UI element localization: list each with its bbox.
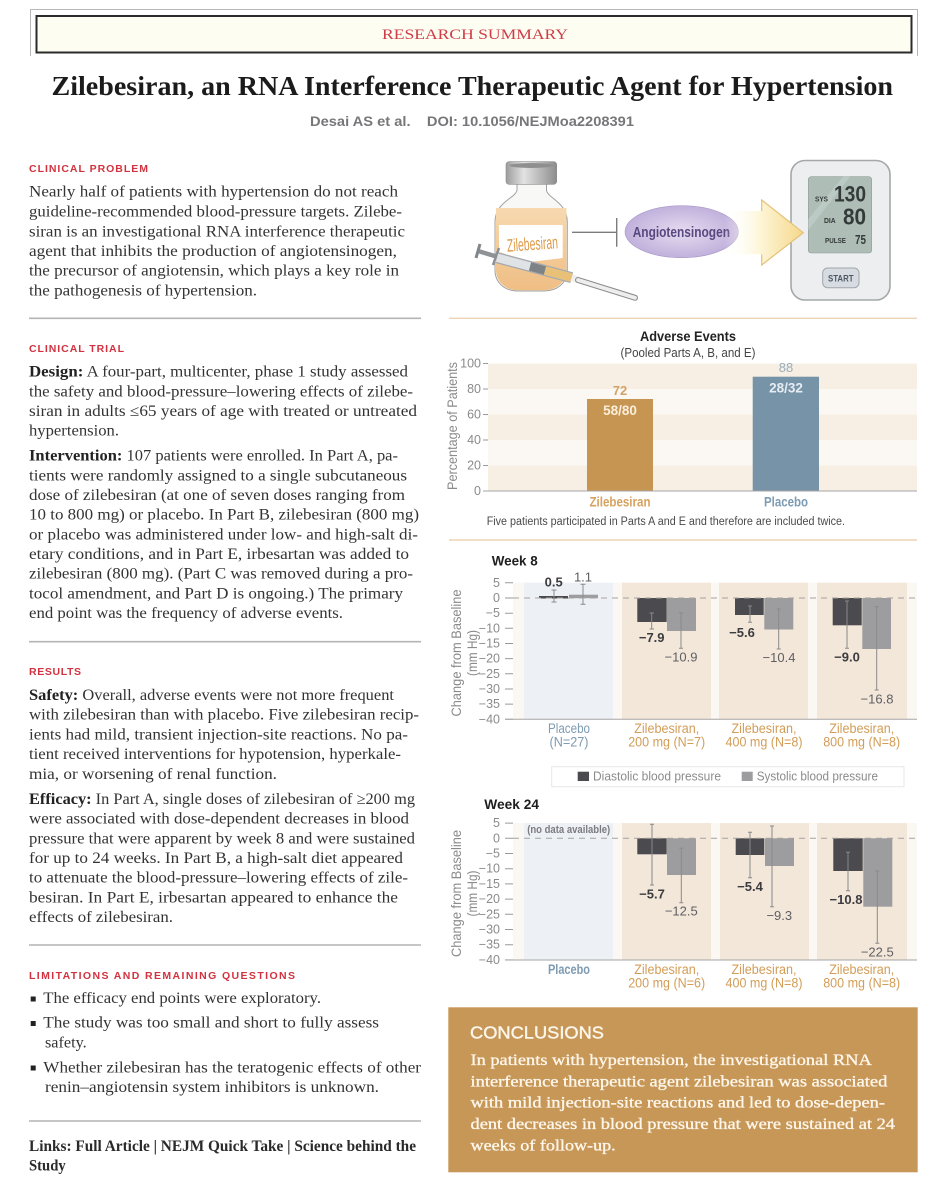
text: intervention: end point was the frequency of adverse events.	[29, 605, 343, 622]
text: conclusions body: weeks of follow-up.	[470, 1137, 616, 1154]
text: clinical problem body: guideline-recommended blood-pressure targets. Zilebe-	[29, 204, 402, 220]
text: intervention: or placebo was administered under low- and high-salt di-	[29, 526, 418, 543]
text: efficacy: besiran. In Part E, irbesartan appeared to enhance the	[29, 889, 398, 906]
icon: blood pressure monitor: 75	[855, 233, 866, 247]
y axis: Change from Baseline	[448, 589, 464, 716]
chart title: Adverse Events	[640, 329, 736, 344]
heading: clinical problem: CLINICAL PROBLEM	[29, 163, 148, 175]
category labels: 200 mg (N=6)	[628, 976, 705, 991]
bars: 400 mg	[736, 826, 794, 923]
text: intervention: tocol amendment, and Part D is ongoing.) The primary	[29, 585, 403, 602]
y axis: Change from Baseline	[448, 830, 464, 957]
text: efficacy: effects of zilebesiran.	[29, 909, 173, 926]
y axis: 5	[493, 816, 500, 830]
text: intervention: zilebesiran (800 mg). (Part C was removed during a pro-	[29, 566, 413, 583]
category labels	[548, 721, 900, 750]
bullet: study size: The study was too small and short to fully assess	[43, 1015, 379, 1032]
bars: placebo	[539, 570, 598, 604]
text: design: hypertension.	[29, 423, 119, 440]
text: intervention: tients were randomly assigned to a single subcutaneous	[29, 467, 407, 484]
category labels: Zilebesiran,	[732, 962, 796, 977]
y axis: 0	[474, 484, 481, 498]
bars: placebo: 0.5	[545, 575, 563, 590]
panel: results	[29, 666, 419, 926]
panel: limitations and remaining questions	[29, 970, 422, 1096]
category labels: 800 mg (N=8)	[823, 976, 900, 991]
bar: placebo: 28/32	[769, 381, 803, 396]
bar: zilebesiran: Zilebesiran	[590, 494, 650, 510]
y axis: −35	[479, 938, 500, 952]
text: conclusions body: with mild injection-site reactions and led to dose-depen-	[470, 1095, 885, 1112]
bullet: efficacy end points: The efficacy end points were exploratory.	[43, 990, 321, 1007]
heading: limitations: LIMITATIONS AND REMAINING QUESTIONS	[29, 970, 295, 982]
icon: blood pressure monitor	[791, 160, 890, 300]
category labels: Zilebesiran,	[829, 721, 894, 736]
bullet: teratogenic effects	[31, 1059, 422, 1096]
category labels: 400 mg (N=8)	[726, 734, 802, 750]
text: clinical problem body: siran is an investigational RNA interference therapeutic	[29, 223, 405, 240]
y axis: (mm Hg)	[464, 630, 480, 676]
text: safety	[29, 687, 419, 783]
category labels: Zilebesiran,	[732, 721, 796, 736]
y axis: −5	[486, 606, 500, 620]
text: conclusions body: interference therapeutic agent zilebesiran was associated	[470, 1073, 887, 1090]
icon: blood pressure monitor: SYS	[815, 197, 828, 204]
icon: syringe	[476, 244, 635, 298]
y axis: Percentage of Patients	[444, 362, 460, 490]
y axis: −35	[479, 697, 500, 711]
icon: inhibition line	[572, 218, 617, 247]
bar: zilebesiran: 72	[613, 383, 627, 398]
panel: conclusions	[448, 1007, 918, 1172]
chart: adverse events	[444, 329, 917, 528]
panel: clinical problem	[29, 163, 405, 299]
bars: 800 mg	[833, 598, 893, 707]
bar: placebo: Placebo	[764, 494, 808, 510]
y axis: −25	[479, 907, 500, 921]
chart title: (Pooled Parts A, B, and E)	[620, 346, 756, 360]
bullet: study size	[31, 1015, 379, 1051]
angiotensinogen ellipse	[625, 206, 738, 258]
bars: 800 mg: −10.8	[830, 892, 862, 907]
bars: 800 mg	[830, 838, 894, 960]
y axis: 0	[493, 831, 500, 845]
bars: 800 mg: −22.5	[861, 945, 894, 960]
bullet: teratogenic effects: Whether zilebesiran has the teratogenic effects of other	[43, 1059, 422, 1076]
heading: conclusions: CONCLUSIONS	[470, 1022, 604, 1042]
panel: clinical trial	[29, 343, 419, 622]
text: safety: Safety: Overall, adverse events were not more frequent	[29, 687, 395, 704]
links	[29, 1138, 416, 1175]
angiotensinogen ellipse: Angiotensinogen	[633, 225, 730, 241]
heading: results: RESULTS	[29, 666, 81, 678]
y axis: −15	[479, 636, 500, 650]
title: Zilebesiran, an RNA Interference Therapeutic Agent for Hypertension	[52, 71, 893, 101]
category labels	[548, 962, 900, 991]
bars: 400 mg: −5.4	[737, 879, 764, 894]
chart: week 8	[448, 553, 917, 750]
icon: blood pressure monitor: 130	[834, 182, 866, 207]
text: design	[29, 364, 417, 440]
category labels: Placebo	[548, 962, 590, 977]
text: intervention: Intervention: 107 patients were enrolled. In Part A, pa-	[29, 448, 398, 465]
text: efficacy: to attenuate the blood-pressure–lowering effects of zile-	[29, 870, 408, 887]
bars: placebo: 1.1	[574, 570, 592, 585]
y axis: −10	[479, 862, 500, 876]
category labels: 400 mg (N=8)	[726, 976, 802, 991]
y axis	[448, 576, 513, 726]
links: Links: Full Article | NEJM Quick Take | Science behind the	[29, 1138, 416, 1155]
bars: 400 mg: −5.6	[729, 625, 755, 640]
footnote: Five patients participated in Parts A and E and therefore are included twice.	[487, 516, 845, 528]
y axis	[444, 356, 488, 498]
text: intervention: 10 to 800 mg) or placebo. In Part B, zilebesiran (800 mg)	[29, 507, 419, 524]
bars: 200 mg: −5.7	[639, 886, 665, 901]
text: clinical problem body	[29, 184, 405, 299]
y axis: 0	[493, 591, 500, 605]
bars: 200 mg	[637, 598, 697, 665]
text: design: siran in adults ≤65 years of age with treated or untreated	[29, 403, 417, 420]
text: safety: mia, or worsening of renal function.	[29, 766, 277, 783]
chart: week 24	[448, 796, 917, 991]
bars: 200 mg: −10.9	[665, 650, 697, 665]
bar: zilebesiran: 58/80	[603, 403, 637, 418]
text: conclusions body: In patients with hypertension, the investigational RNA	[470, 1052, 872, 1069]
y axis: −10	[479, 621, 500, 635]
text: clinical problem body: agent that inhibits the production of angiotensinogen,	[29, 243, 397, 260]
y axis: −30	[479, 922, 500, 936]
y axis: −25	[479, 667, 500, 681]
arrow: to blood pressure	[724, 200, 803, 265]
text: design: Design: A four-part, multicenter, phase 1 study assessed	[29, 364, 408, 381]
text: clinical problem body: Nearly half of patients with hypertension do not reach	[29, 184, 398, 201]
bar: zilebesiran	[587, 383, 653, 510]
text: efficacy: pressure that were apparent by week 8 and were sustained	[29, 830, 415, 847]
chart heading: week 8: Week 8	[492, 553, 538, 569]
y axis: 5	[493, 576, 500, 590]
citation: Desai AS et al. DOI: 10.1056/NEJMoa2208391	[310, 113, 634, 129]
icon: blood pressure monitor: PULSE	[825, 238, 846, 245]
category labels: Zilebesiran,	[829, 962, 894, 977]
y axis: 20	[467, 458, 481, 472]
icon: vial with label	[495, 162, 567, 291]
text: conclusions body: dent decreases in blood pressure that were sustained at 24	[470, 1116, 895, 1133]
bars: 400 mg: −9.3	[766, 908, 792, 923]
icon: blood pressure monitor: DIA	[824, 218, 836, 225]
bullet: study size: safety.	[45, 1034, 87, 1051]
y axis: −20	[479, 652, 500, 666]
y axis: (mm Hg)	[464, 870, 480, 916]
icon: vial with label: Zilebesiran	[506, 232, 559, 256]
note: no data available: (no data available)	[527, 824, 610, 836]
text: efficacy: Efficacy: In Part A, single doses of zilebesiran of ≥200 mg	[29, 791, 415, 808]
y axis: −20	[479, 892, 500, 906]
y axis: 40	[467, 433, 481, 447]
category labels: (N=27)	[550, 734, 588, 750]
bars: 800 mg: −16.8	[861, 692, 893, 707]
banner: research summary	[30, 10, 918, 56]
y axis: −40	[479, 953, 500, 967]
bars: 400 mg	[729, 598, 795, 665]
category labels: 800 mg (N=8)	[823, 734, 900, 750]
text: safety: tient received interventions for hypotension, hyperkale-	[29, 746, 401, 763]
bar: placebo: 88	[779, 360, 793, 375]
bullet: teratogenic effects: renin–angiotensin system inhibitors is unknown.	[45, 1079, 379, 1096]
bars: 400 mg: −10.4	[763, 650, 795, 665]
y axis: 80	[467, 382, 481, 396]
category labels: Zilebesiran,	[634, 721, 699, 736]
y axis: −15	[479, 877, 500, 891]
y axis: −40	[479, 712, 500, 726]
legend: Systolic blood pressure	[757, 770, 878, 784]
links: Study	[29, 1158, 66, 1175]
text: intervention: dose of zilebesiran (at one of seven doses ranging from	[29, 487, 405, 504]
text: efficacy	[29, 791, 415, 926]
bars: 200 mg	[637, 824, 698, 919]
category labels: Placebo	[548, 721, 590, 736]
text: conclusions body	[470, 1052, 895, 1154]
text: safety: ients had mild, transient injection-site reactions. No pa-	[29, 726, 408, 743]
banner: research summary: RESEARCH SUMMARY	[382, 27, 569, 43]
illustration: mechanism of action	[476, 160, 890, 300]
y axis: −30	[479, 682, 500, 696]
icon: blood pressure monitor: START	[828, 274, 854, 284]
bars: 200 mg: −12.5	[665, 904, 698, 919]
category labels: 200 mg (N=7)	[628, 734, 705, 750]
chart title	[620, 329, 756, 360]
y axis: 100	[460, 356, 481, 370]
bar: placebo	[753, 360, 819, 510]
y axis: −5	[486, 846, 500, 860]
legend: Diastolic blood pressure	[593, 770, 721, 784]
bars: 800 mg: −9.0	[834, 650, 860, 665]
legend	[552, 767, 904, 787]
text: intervention: etary conditions, and in Part E, irbesartan was added to	[29, 546, 409, 563]
bars: 200 mg: −7.9	[639, 630, 665, 645]
y axis	[448, 816, 513, 967]
text: clinical problem body: the pathogenesis of hypertension.	[29, 282, 257, 299]
icon: blood pressure monitor: 80	[843, 203, 866, 229]
text: safety: with zilebesiran than with placebo. Five zilebesiran recip-	[29, 707, 419, 724]
text: clinical problem body: the precursor of angiotensin, which plays a key role in	[29, 263, 399, 280]
text: design: the safety and blood-pressure–lowering effects of zilebe-	[29, 383, 413, 400]
text: efficacy: for up to 24 weeks. In Part B, a high-salt diet appeared	[29, 850, 403, 867]
category labels: Zilebesiran,	[634, 962, 699, 977]
heading: clinical trial: CLINICAL TRIAL	[29, 343, 125, 355]
y axis: 60	[467, 408, 481, 422]
text: intervention	[29, 448, 419, 622]
chart heading: week 24: Week 24	[484, 796, 539, 812]
text: efficacy: were associated with dose-dependent decreases in blood	[29, 811, 409, 828]
